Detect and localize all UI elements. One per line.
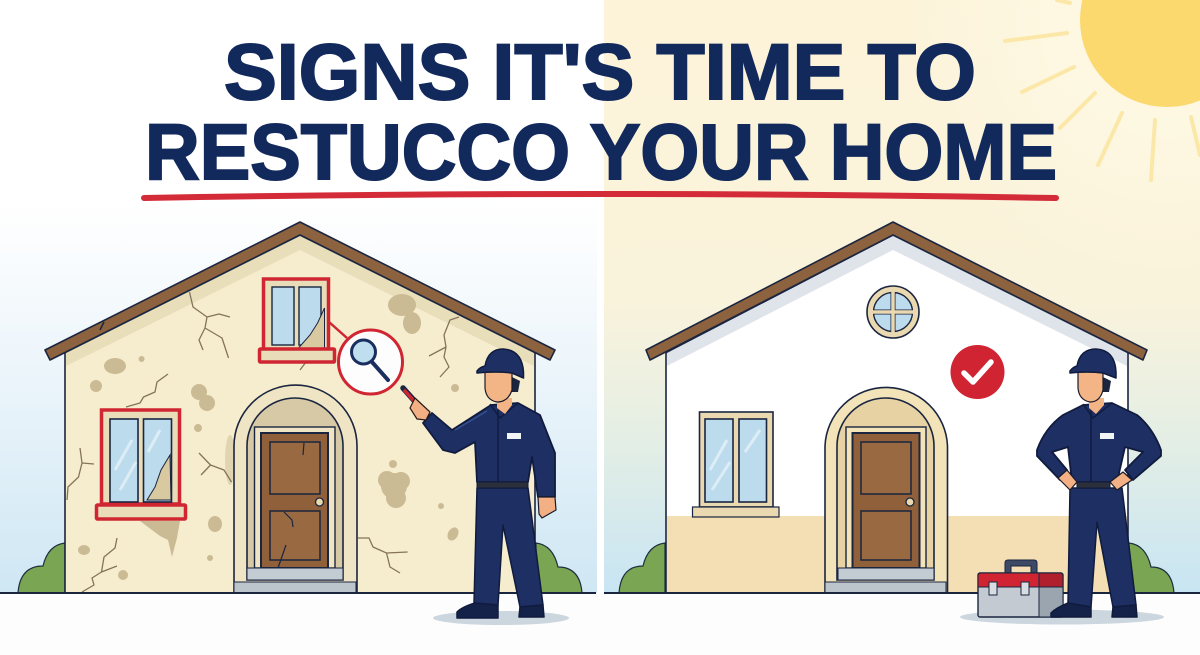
magnifier callout connector [329,322,347,338]
torso and pointing arm [423,403,555,497]
hands [1058,470,1132,490]
ground area [0,594,1200,655]
hard hat [1070,349,1116,378]
panel: right sunny sky background [604,0,1200,593]
round gable window [867,286,919,338]
roof [45,222,555,360]
smooth white wall [666,235,1128,593]
stucco wall with cracks and stains [65,235,535,593]
door steps [234,568,356,593]
ground line right [604,592,1200,594]
icon: red check badge [950,345,1004,399]
upper window highlighted in red [260,279,334,362]
clean window [692,412,779,517]
ground shadow [433,611,569,625]
door steps [825,568,946,593]
panel: left sky background [0,0,597,593]
stucco stains [78,294,461,580]
door [852,433,920,568]
beige wainscot [667,516,1127,592]
hard hat [477,349,524,378]
torso and arms [1037,403,1161,488]
wall cracks [67,292,459,592]
left bushes [18,543,582,593]
legs and shoes [1051,488,1137,617]
door [261,433,328,568]
title [145,27,1057,196]
title line 1: SIGNS IT'S TIME TO [224,27,976,116]
legs and shoes [457,488,544,618]
title line 2: RESTUCCO YOUR HOME [145,107,1057,196]
icon: sun with rays [907,0,1200,280]
lower window highlighted in red [96,410,186,519]
panel: restored house (after) [604,222,1200,624]
roof [646,222,1147,360]
panel: damaged house (before) [0,222,596,625]
face and neck [485,372,520,414]
ground shadow [960,610,1164,624]
hand and red pen [403,388,430,420]
face and neck [1078,372,1111,414]
inspector worker with pen [403,349,569,625]
resting hand [538,497,556,518]
toolbox [978,560,1063,617]
ground line left [0,592,596,594]
callout: magnifying glass [338,330,402,394]
proud worker hands on hips [1037,349,1161,617]
arched doorway [825,387,948,593]
arched doorway [234,385,357,593]
right side bushes [619,543,1174,593]
red title underline [144,194,1056,198]
